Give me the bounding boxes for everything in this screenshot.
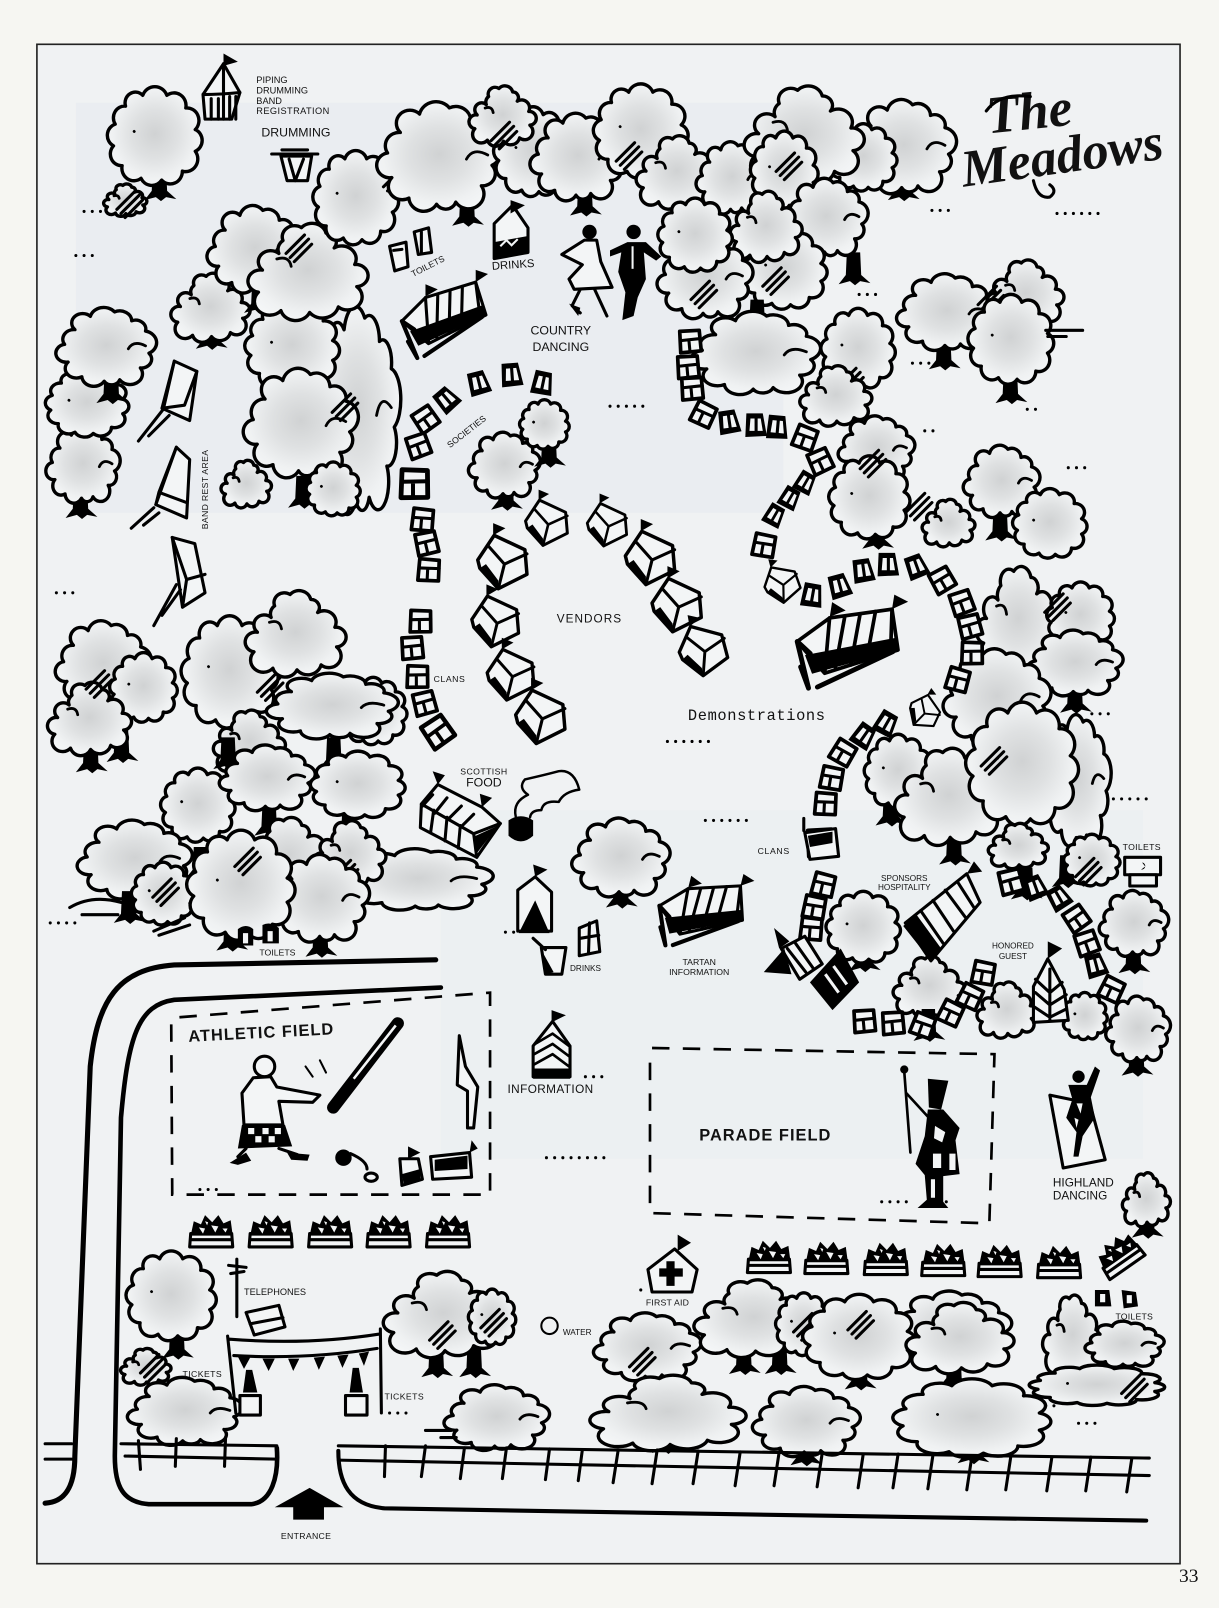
ticket booth right [346, 1368, 367, 1415]
labels: CLANS [434, 674, 465, 684]
telephone pole and box [229, 1259, 285, 1335]
tree cluster: right middle [864, 649, 1120, 900]
labels: ATHLETIC FIELD [188, 1020, 335, 1046]
dotted path trails [50, 210, 1148, 1423]
toilets top [390, 228, 432, 271]
tree cluster: bottom centre [383, 1271, 550, 1450]
tree cluster: bottom left [121, 1251, 243, 1445]
labels: TOILETS [1123, 842, 1161, 852]
band rest area tents [131, 361, 205, 626]
labels: PARADE FIELD [699, 1126, 831, 1144]
labels: HIGHLAND [1053, 1176, 1114, 1189]
labels: WATER [563, 1328, 592, 1337]
toilets left [238, 923, 279, 945]
tree cluster: right of the vendors [829, 416, 1123, 714]
roads [45, 960, 1146, 1521]
tree cluster: societies circle [468, 400, 569, 511]
fence [121, 1438, 1149, 1492]
tree cluster: top arc [377, 84, 768, 227]
honored guest tent [1033, 941, 1068, 1022]
labels [182, 75, 1161, 1541]
tree cluster: top left [104, 87, 202, 218]
drinks booth lower [533, 921, 600, 974]
labels: HOSPITALITY [878, 883, 931, 892]
labels: TOILETS [1115, 1312, 1153, 1322]
labels: TOILETS [259, 948, 296, 958]
faint tinted area top left [76, 103, 783, 513]
shot post [457, 1036, 478, 1128]
labels: COUNTRY [531, 323, 591, 337]
tree cluster: far right pair [897, 260, 1083, 404]
clans stall right [804, 818, 839, 859]
labels: TICKETS [384, 1392, 424, 1402]
labels: DRINKS [491, 258, 535, 273]
labels: DANCING [1053, 1190, 1107, 1203]
tree cluster: left middle pair [47, 621, 177, 773]
labels: Demonstrations [688, 707, 826, 725]
labels: ENTRANCE [281, 1531, 331, 1541]
labels: BAND [256, 96, 282, 106]
hammer ball and chain [335, 1150, 377, 1181]
tree cluster: bottom right row [590, 1280, 1051, 1466]
tree: near sponsors tent [826, 891, 900, 972]
labels: INFORMATION [669, 967, 729, 977]
piping and drumming tent [203, 54, 240, 119]
tree cluster: top right woods [657, 86, 957, 426]
labels: CLANS [758, 846, 790, 856]
labels: INFORMATION [507, 1083, 594, 1096]
tree cluster: upper left woods [171, 151, 409, 516]
labels: SPONSORS [881, 874, 928, 883]
water point [541, 1318, 558, 1334]
gate with bunting [228, 1329, 381, 1413]
first aid post [648, 1235, 697, 1292]
marquee tent: country dancing [402, 270, 488, 358]
planters left row [190, 1215, 470, 1247]
icon: drum [272, 150, 318, 181]
tree cluster: big woods by athletic field [70, 591, 493, 958]
page number: 33 [1179, 1566, 1198, 1587]
ticket booth left [240, 1370, 260, 1415]
labels: DANCING [532, 340, 589, 354]
labels: DRUMMING [261, 126, 330, 140]
cauldron with smoke [509, 771, 579, 841]
societies booths [400, 362, 556, 583]
tartan information tent [650, 856, 755, 962]
tree cluster: right edge lower [893, 891, 1171, 1077]
vendor tents [472, 490, 730, 744]
labels: TARTAN [683, 957, 716, 967]
labels: DRUMMING [256, 86, 308, 96]
toilets bottom right [1095, 1290, 1138, 1308]
country dancers [562, 225, 661, 320]
sponsors hospitality tent [903, 861, 982, 961]
labels: HONORED [992, 942, 1034, 951]
piper [900, 1065, 960, 1208]
labels: SOCIETIES [445, 413, 488, 450]
labels: FOOD [466, 776, 502, 790]
small tent near drinks [518, 864, 552, 933]
clans booths left [402, 609, 456, 750]
labels: TOILETS [410, 253, 446, 279]
honored guest booths [854, 868, 1127, 1040]
parade field boundary [650, 1048, 994, 1223]
labels: TICKETS [182, 1369, 222, 1379]
athletic field boundary [171, 993, 490, 1195]
highland dancer on board [1050, 1066, 1105, 1168]
planters right row [747, 1229, 1145, 1280]
labels: BAND REST AREA [200, 450, 210, 529]
tree: centre beside drinks [572, 818, 670, 909]
small field tents [400, 1140, 478, 1185]
labels: PIPING [256, 75, 288, 85]
drinks stand top [494, 200, 528, 259]
labels: VENDORS [557, 613, 622, 626]
tree cluster: left column [45, 307, 157, 519]
title: The Meadows: Meadows [956, 113, 1167, 199]
marquee tent: demonstrations [790, 581, 909, 701]
title: The Meadows: The [983, 77, 1075, 145]
labels: REGISTRATION [256, 106, 330, 116]
caber [306, 1023, 398, 1107]
hammer thrower [230, 1056, 320, 1165]
information tent [533, 1010, 570, 1079]
labels: GUEST [999, 952, 1027, 961]
title: The Meadows [956, 77, 1167, 199]
striped tents by sponsors tree [764, 928, 859, 1010]
scottish food tent [420, 771, 500, 857]
labels: DRINKS [570, 964, 602, 973]
labels: SCOTTISH [460, 766, 508, 776]
tree cluster: bottom right corner [1029, 1295, 1165, 1405]
right arc booths [678, 330, 984, 942]
labels: TELEPHONES [244, 1287, 306, 1297]
toilets right [1125, 857, 1161, 886]
tree: small near highland dancing [1122, 1173, 1170, 1239]
labels: FIRST AID [646, 1297, 689, 1307]
arrow: entrance [275, 1488, 343, 1520]
faint tinted area centre [441, 810, 1143, 1159]
